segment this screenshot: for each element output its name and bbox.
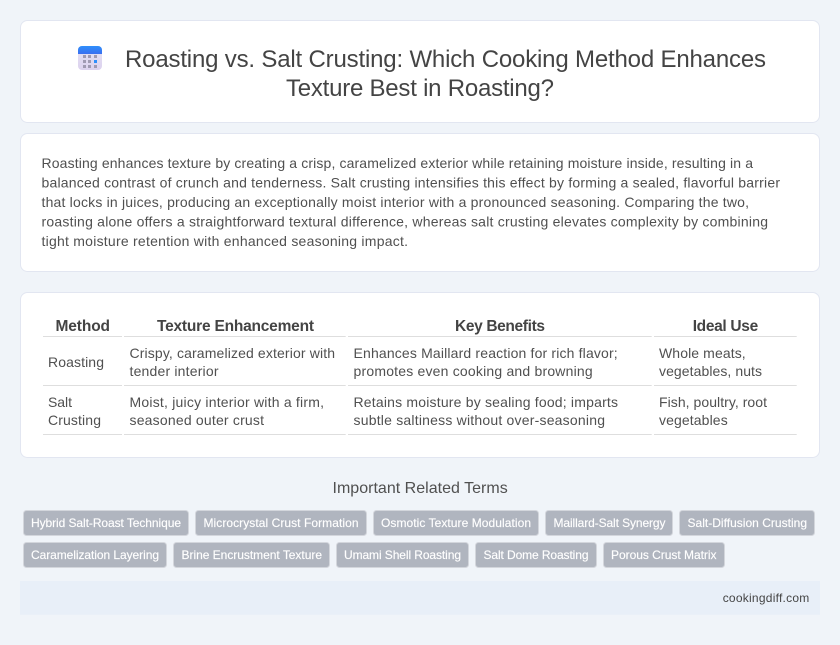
text block: summary: roasting alone offers a straightforward textural difference, whereas salt crusting elevates complexity by combining xyxy=(42,214,768,230)
table row: roasting: Roasting xyxy=(48,354,104,370)
tag list: related terms: Salt Dome Roasting xyxy=(484,548,588,562)
footer: cookingdiff.com xyxy=(723,591,809,605)
footer xyxy=(20,581,820,615)
title: Texture Best in Roasting? xyxy=(286,75,554,102)
text block: summary: that locks in juices, producing an exceptionally moist interior with a pronounced seasoning. Comparing the two, xyxy=(42,194,749,210)
table row: roasting: tender interior xyxy=(130,363,219,379)
tag list: related terms: Hybrid Salt-Roast Technique xyxy=(31,516,181,530)
table header row: Ideal Use xyxy=(693,318,759,335)
table header row: Method xyxy=(56,318,110,335)
table row: salt crusting: subtle saltiness without over-seasoning xyxy=(354,412,605,428)
text block: summary xyxy=(42,155,780,249)
title xyxy=(125,46,766,102)
table header row: Texture Enhancement xyxy=(157,318,314,335)
title: Roasting vs. Salt Crusting: Which Cooking Method Enhances xyxy=(125,46,766,73)
tag list: related terms: Salt-Diffusion Crusting xyxy=(688,516,807,530)
table row: salt crusting: Moist, juicy interior with a firm, xyxy=(130,394,324,410)
panel: summary paragraph xyxy=(20,134,820,272)
table row: salt crusting: Fish, poultry, root xyxy=(659,394,767,410)
table header row xyxy=(56,318,759,335)
tag list: related terms xyxy=(24,510,814,568)
heading: related terms: Important Related Terms xyxy=(332,480,508,497)
table row: roasting: vegetables, nuts xyxy=(659,363,762,379)
panel: comparison table xyxy=(20,292,820,458)
text block: summary: tight moisture retention with enhanced seasoning impact. xyxy=(42,233,408,249)
tag list: related terms: Porous Crust Matrix xyxy=(611,548,716,562)
tag list: related terms: Microcrystal Crust Formation xyxy=(204,516,358,530)
tag list: related terms: Umami Shell Roasting xyxy=(344,548,461,562)
icon: calendar xyxy=(78,46,102,70)
tag list: related terms: Caramelization Layering xyxy=(31,548,159,562)
table row: salt crusting: vegetables xyxy=(659,412,728,428)
table row: roasting xyxy=(48,345,762,379)
table row: roasting: Crispy, caramelized exterior with xyxy=(130,345,335,361)
tag list: related terms: Brine Encrustment Texture xyxy=(182,548,322,562)
tag list: related terms: Maillard-Salt Synergy xyxy=(554,516,666,530)
table row: salt crusting: Salt xyxy=(48,394,72,410)
panel: title header xyxy=(20,20,820,122)
table row: roasting: promotes even cooking and browning xyxy=(354,363,593,379)
table header row: Key Benefits xyxy=(455,318,545,335)
table row: roasting: Whole meats, xyxy=(659,345,746,361)
table row: salt crusting xyxy=(48,394,767,428)
text block: summary: balanced contrast of crunch and tenderness. Salt crusting intensifies this effect by forming a sealed, flavorful barrier xyxy=(42,174,780,190)
text block: summary: Roasting enhances texture by creating a crisp, caramelized exterior while retaining moisture inside, resulting in a xyxy=(42,155,753,171)
table row: salt crusting: Retains moisture by sealing food; imparts xyxy=(354,394,618,410)
table row: salt crusting: seasoned outer crust xyxy=(130,412,264,428)
tag list: related terms: Osmotic Texture Modulation xyxy=(381,516,531,530)
table row: salt crusting: Crusting xyxy=(48,412,101,428)
table row: roasting: Enhances Maillard reaction for rich flavor; xyxy=(354,345,618,361)
